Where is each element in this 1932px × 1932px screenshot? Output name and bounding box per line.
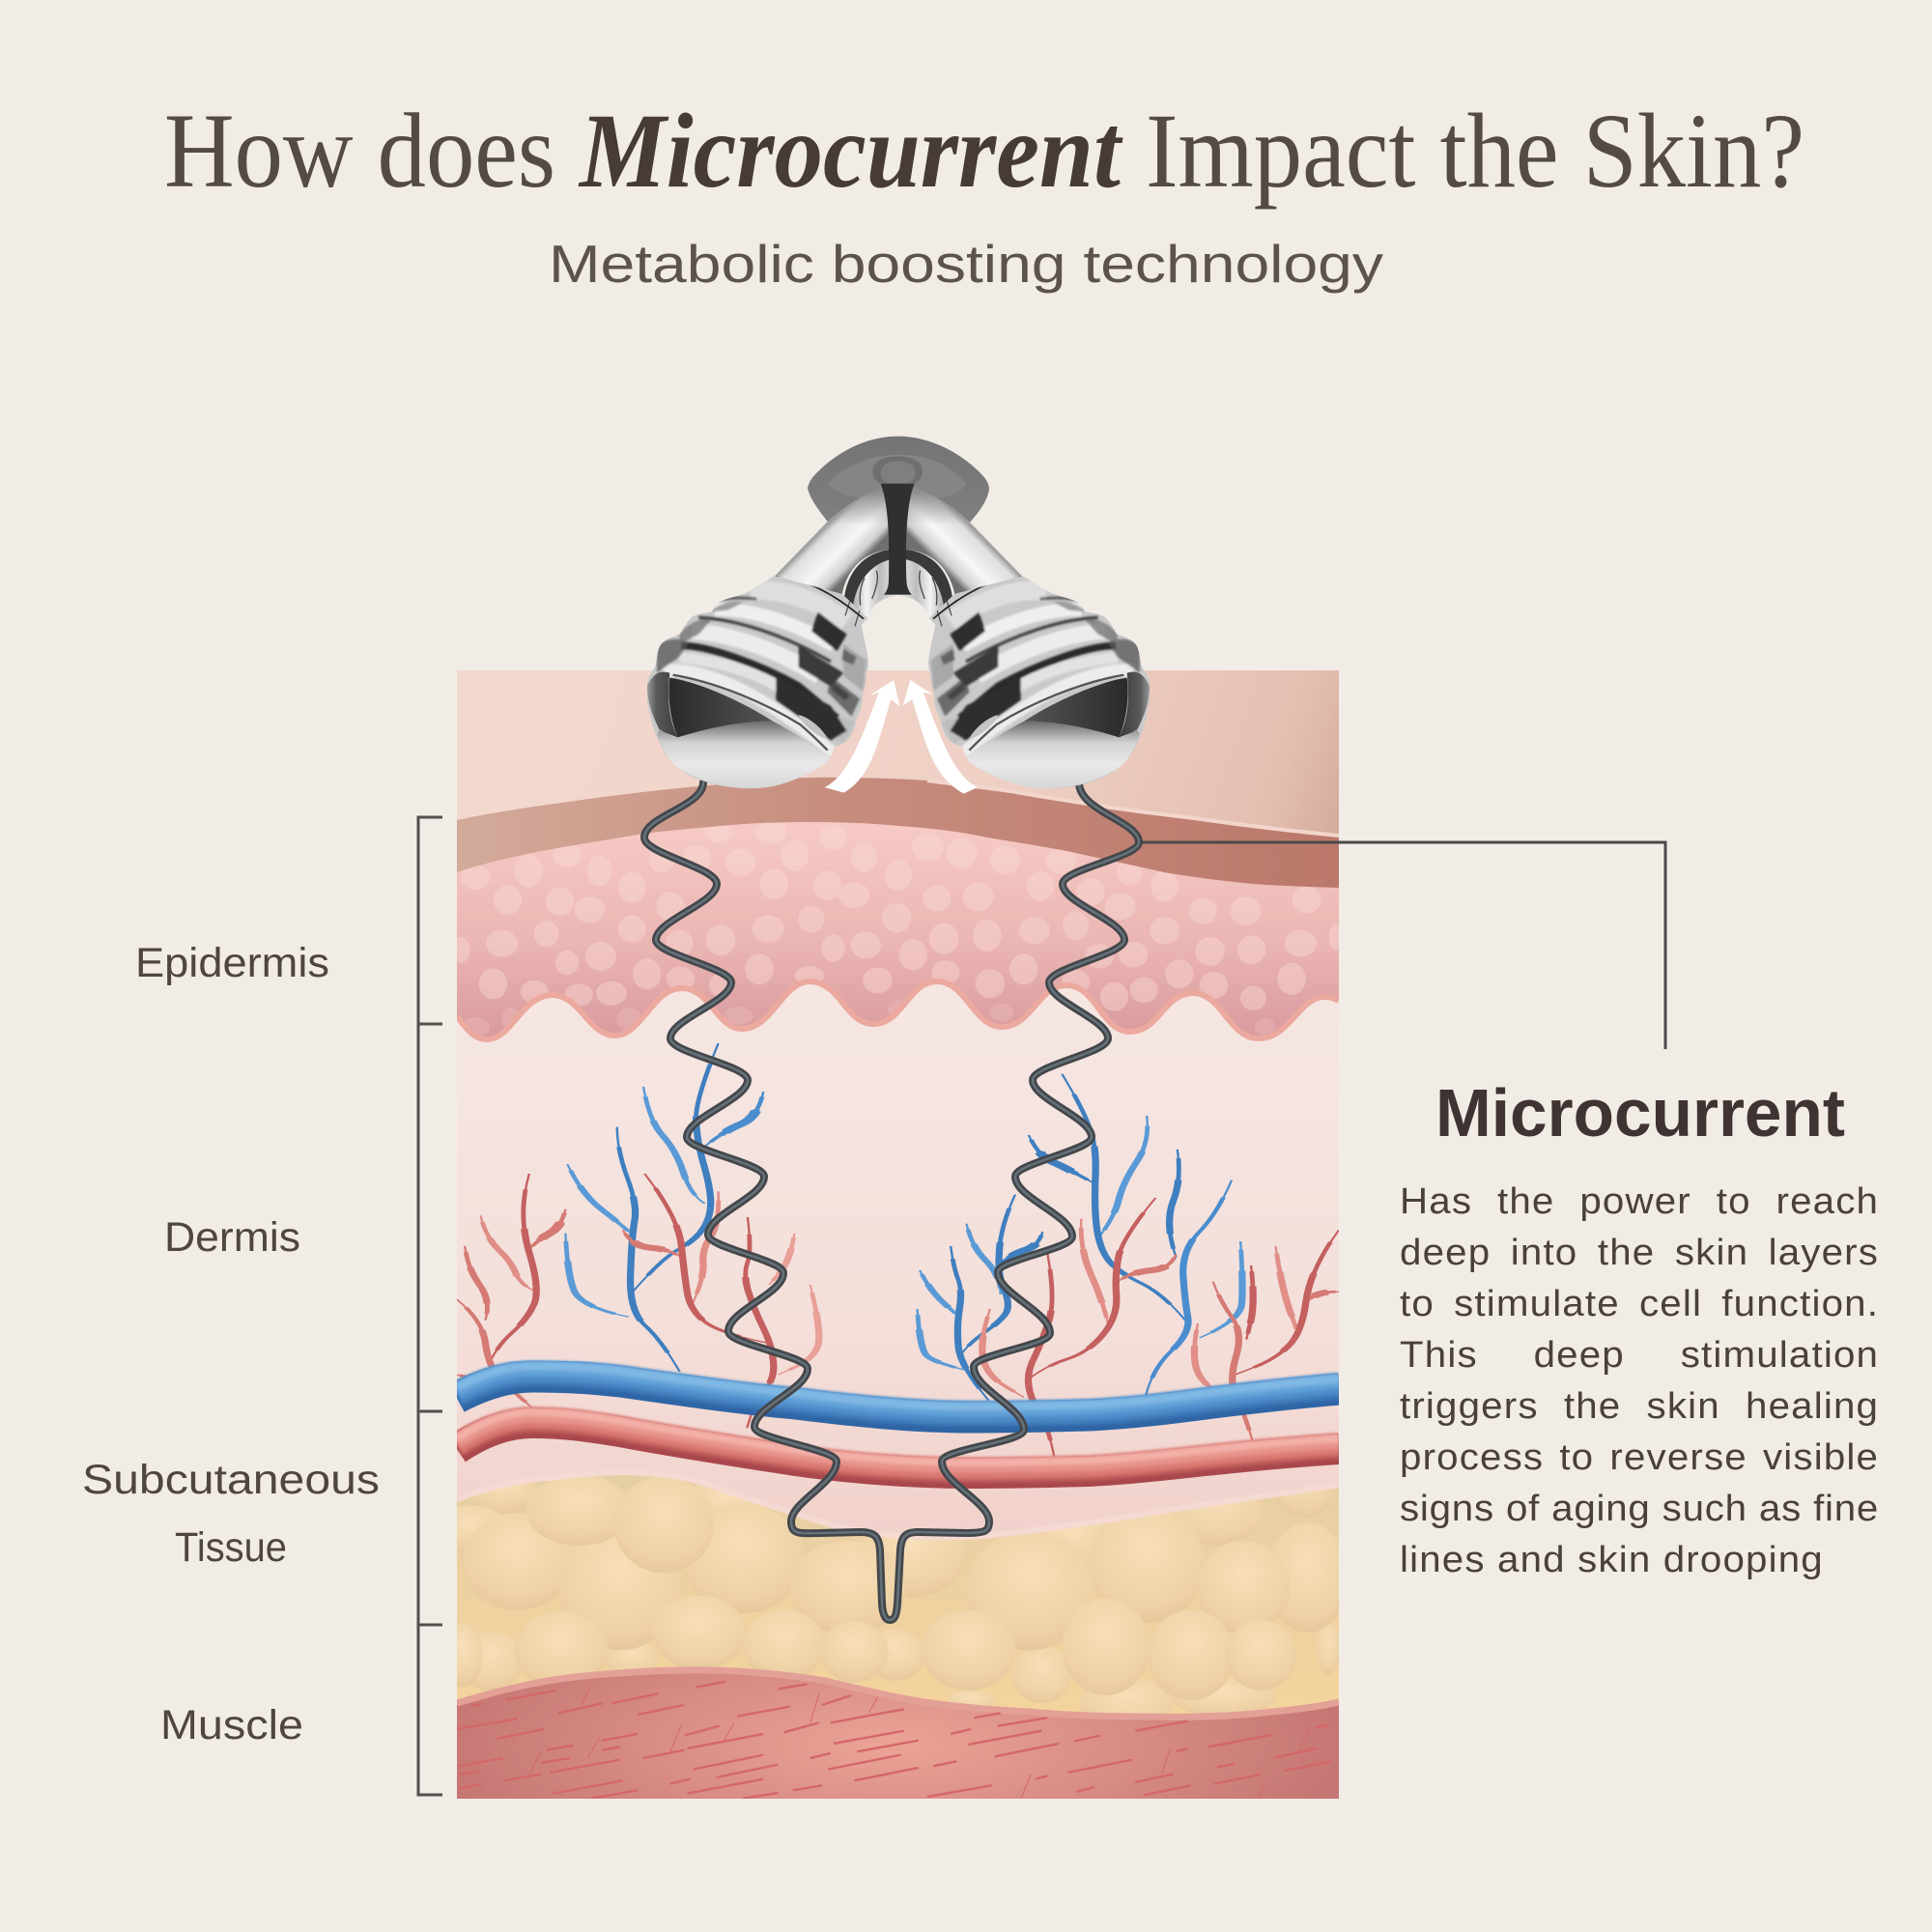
device back plate — [808, 437, 989, 528]
layer labels — [82, 940, 380, 1748]
title: Microcurrent — [578, 92, 1123, 210]
callout heading: Microcurrent — [1435, 1075, 1845, 1151]
epidermis layer — [451, 800, 1343, 1039]
device: microcurrent roller — [644, 437, 1152, 792]
microcurrent wave — [644, 782, 1139, 1620]
layer labels: Dermis — [164, 1214, 300, 1261]
skin surface layer — [457, 670, 1339, 834]
callout text: lines and skin drooping — [1400, 1540, 1824, 1580]
dermis layer — [457, 1090, 1339, 1533]
right arrow — [903, 680, 978, 794]
skin cross-section panel — [433, 670, 1349, 1799]
artery: large red vessel — [457, 1412, 1339, 1473]
callout text — [1400, 1181, 1879, 1580]
left roller head — [644, 485, 898, 792]
title: How does — [164, 92, 555, 210]
callout text: to stimulate cell function. — [1400, 1284, 1879, 1324]
muscle fibres — [456, 1682, 1331, 1799]
blue venules — [565, 1043, 1242, 1401]
muscle layer — [456, 1670, 1339, 1799]
red arterioles — [457, 1092, 1339, 1457]
bracket: skin layer markers — [418, 817, 442, 1795]
title: Impact the Skin? — [1146, 92, 1804, 210]
callout text: process to reverse visible — [1400, 1437, 1879, 1478]
title — [164, 92, 1804, 210]
connector line to Microcurrent callout — [1138, 842, 1665, 1049]
layer labels: Tissue — [175, 1524, 287, 1571]
centre stem and knob — [872, 456, 923, 595]
dermis-fat membrane — [457, 1472, 1339, 1537]
callout text: This deep stimulation — [1400, 1335, 1879, 1376]
stratum corneum band — [457, 778, 1339, 888]
callout text: Has the power to reach — [1400, 1181, 1879, 1222]
subcutaneous fat layer — [457, 1475, 1339, 1714]
arrows: current direction — [825, 680, 978, 794]
subtitle: Metabolic boosting technology — [549, 234, 1384, 294]
callout text: signs of aging such as fine — [1400, 1489, 1879, 1529]
callout text: triggers the skin healing — [1400, 1386, 1879, 1427]
callout text: deep into the skin layers — [1400, 1233, 1879, 1273]
layer labels: Muscle — [160, 1702, 303, 1748]
right roller head — [898, 485, 1152, 792]
left arrow — [825, 680, 900, 793]
layer labels: Subcutaneous — [82, 1457, 380, 1503]
vein: large blue vessel — [457, 1366, 1339, 1417]
layer labels: Epidermis — [135, 940, 329, 986]
